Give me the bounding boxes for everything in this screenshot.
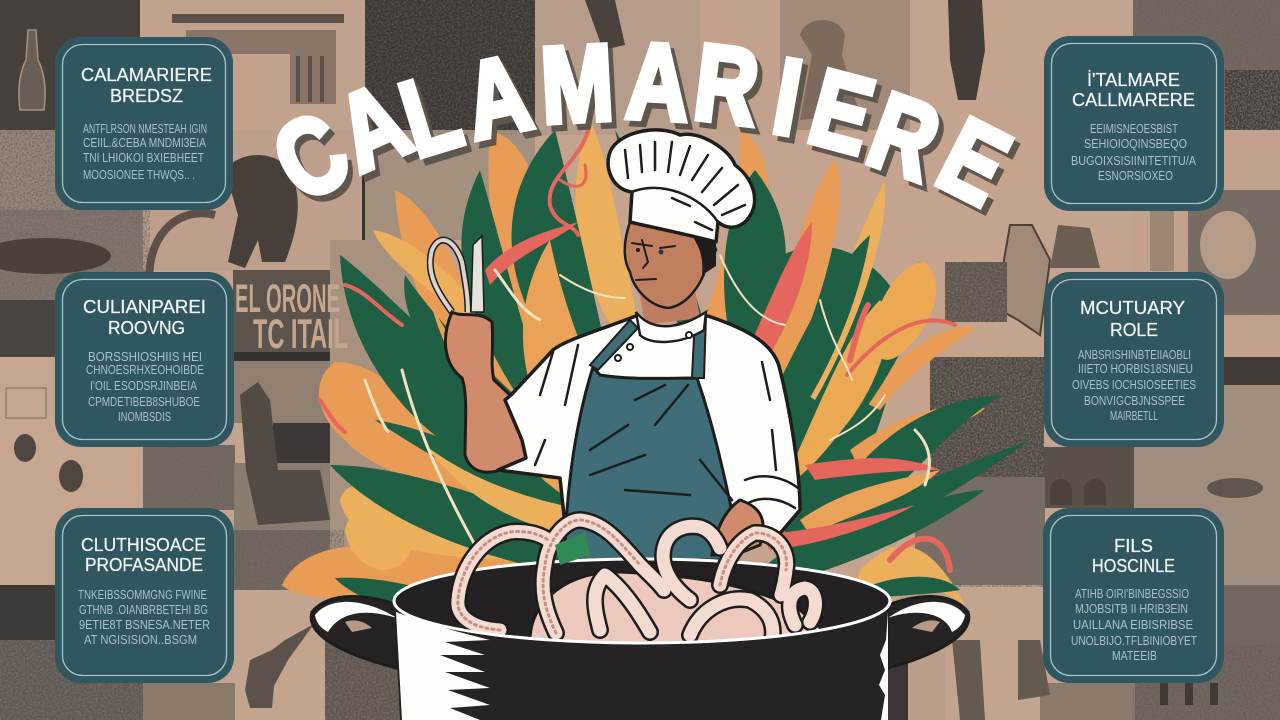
octopus: tentacle flesh <box>458 520 815 640</box>
panel: Fils Hoscinle <box>1043 508 1224 683</box>
heading <box>1092 536 1175 576</box>
body text: BORSSHIOSHIIS HEI <box>88 349 202 364</box>
red tendrils <box>320 122 955 570</box>
heading: CULIANPAREI <box>83 297 206 317</box>
title: E <box>798 45 885 178</box>
body text: INOMBSDIS <box>118 409 171 424</box>
chef: raised forearm and hand <box>445 312 530 472</box>
body text: IIIETO HORBIS18SNIEU <box>1078 361 1193 376</box>
heading <box>83 297 206 338</box>
pot: left body highlight <box>396 612 490 720</box>
body text: CPMDETIBEB8SHUBOE <box>88 394 200 409</box>
print: ruined block <box>945 262 1007 322</box>
heading <box>81 65 212 106</box>
title: A <box>319 58 426 195</box>
heading: ROOVNG <box>108 318 185 338</box>
body text: ANBSRISHINBTEIIAOBLI <box>1078 347 1191 362</box>
heading <box>81 535 206 575</box>
print: poster lettering <box>235 277 348 357</box>
body text <box>1071 586 1197 663</box>
chef: jacket <box>498 316 800 545</box>
title: M <box>538 21 616 146</box>
print: poster lettering: TC ITAIL <box>253 310 348 357</box>
body text: BONVIGCBJNSSPEE <box>1084 393 1185 408</box>
octopus <box>458 520 825 650</box>
body text: MATEEIB <box>1112 648 1157 663</box>
back yellow leaves <box>340 120 965 605</box>
body text <box>1071 121 1196 183</box>
heading: BREDSZ <box>110 86 183 106</box>
pot: rim highlight <box>394 601 890 643</box>
print: shells <box>14 434 83 492</box>
body text: AT NGISISION..BSGM <box>84 632 197 647</box>
body text: OIVEBS IOCHSIOSEETIES <box>1072 377 1196 392</box>
print: tree trunk <box>325 630 400 720</box>
body text: UNOLBIJO.TFLBINIOBYET <box>1071 633 1197 648</box>
body text: SEHIOIOQINSBEQO <box>1084 136 1187 151</box>
print: postcard <box>6 388 46 418</box>
chef illustration <box>430 130 800 560</box>
body text: I'OIL ESODSRJINBEIA <box>90 378 197 393</box>
print: figure top right <box>948 0 985 100</box>
body text: MOOSIONEE THWQS.. . <box>83 167 195 182</box>
octopus: tentacle outlines <box>458 520 815 640</box>
title <box>253 19 1028 228</box>
heading: HOSCINLE <box>1092 556 1175 576</box>
body text: ESNORSIOXEO <box>1098 168 1173 183</box>
chef: neck and collar <box>615 290 706 361</box>
pot: interior <box>394 559 890 643</box>
print: arcades <box>1050 479 1106 505</box>
title: I <box>765 35 810 158</box>
title: E <box>921 94 1028 228</box>
body text <box>86 349 204 424</box>
body text: CEIIL.&CEBA MNDMI3EIA <box>83 135 206 150</box>
print: building <box>172 14 344 104</box>
heading: CALLMARERE <box>1072 90 1195 110</box>
print: portrait face <box>1200 211 1256 279</box>
print: tentacle ornament <box>149 213 215 285</box>
pot: right body highlight <box>879 612 888 720</box>
foliage burst behind the chef <box>282 120 1030 625</box>
pot with octopus <box>311 520 969 720</box>
title: R <box>688 20 765 149</box>
body text: TNI LHIOKOI BXIEBHEET <box>83 150 204 165</box>
cream strands <box>365 255 929 545</box>
chef: head <box>625 222 716 308</box>
title: R <box>854 69 955 204</box>
print: second cook <box>1050 225 1100 268</box>
body text: BUGOIXSISIINITETITU/A <box>1071 153 1196 168</box>
heading: CALAMARIERE <box>81 65 212 85</box>
panel: Cluthisoace Profasande <box>55 508 234 683</box>
heading: ROLE <box>1110 320 1158 340</box>
print: seated figure <box>240 382 330 525</box>
print: tub <box>0 238 111 274</box>
title: L <box>387 49 473 180</box>
pot: right handle <box>888 596 969 668</box>
title: A <box>454 31 540 162</box>
chef: toque <box>608 130 755 242</box>
body text: ANTFLRSON NMESTEAH IGIN <box>83 121 207 136</box>
body text: EEIMISNEOESBIST <box>1090 121 1178 136</box>
title: A <box>624 19 692 144</box>
octopus: glint <box>555 532 590 565</box>
front orange leaves <box>425 240 940 535</box>
print: dark figure at top centre <box>585 0 625 50</box>
panel: Culianparei Roovng <box>55 272 234 447</box>
heading: PROFASANDE <box>85 555 203 575</box>
heading: FILS <box>1114 536 1153 556</box>
octopus: central mass <box>530 572 825 650</box>
heading <box>1072 70 1195 110</box>
title: C <box>253 88 368 224</box>
print: bottle <box>19 30 45 110</box>
print: standing figure <box>225 155 298 268</box>
body text: CHNOESRHXEOHOIBDE <box>86 362 204 377</box>
green leaves <box>330 130 1030 625</box>
heading: İ'TALMARE <box>1087 70 1180 90</box>
print: bowing man <box>245 624 314 708</box>
back filler leaves <box>400 240 900 600</box>
body text: GTHNB .OIANBRBETEHI BG <box>79 602 208 617</box>
heading: MCUTUARY <box>1080 298 1185 318</box>
panel: Italmare Callmarere <box>1044 36 1224 211</box>
chef: tongs <box>430 236 484 312</box>
body text <box>78 587 210 647</box>
panel: Mcutuary Role <box>1044 272 1224 447</box>
heading: CLUTHISOACE <box>81 535 206 555</box>
body text: ATIHB OIRI'BINBEGSSIO <box>1075 586 1189 601</box>
body text: TNKEIBSSOMMGNG FWINE <box>78 587 207 602</box>
chef: lowered hand <box>712 500 763 555</box>
print: woman cook <box>1000 225 1050 335</box>
print: poster lettering: EL ORONE <box>235 277 340 321</box>
pot: left handle <box>311 596 397 668</box>
body text: MJOBSITB II HRIB3EIN <box>1075 601 1188 616</box>
octopus: suckers <box>458 520 787 633</box>
panel: Calamariere Bredsz <box>55 37 233 210</box>
pot: body <box>394 601 890 720</box>
body text: 9ETIE8T BSNESA.NETER <box>79 617 210 632</box>
print: cat and man <box>952 640 1050 720</box>
print: boy <box>800 20 860 120</box>
heading <box>1080 298 1185 340</box>
print: palazzo <box>1160 683 1218 705</box>
body text <box>83 121 207 182</box>
print: smoke and boat <box>1207 478 1263 498</box>
chef: apron <box>565 315 735 560</box>
back orange leaves <box>282 130 985 601</box>
body text <box>1072 347 1196 423</box>
red streaks <box>485 222 940 550</box>
body text: MAIRBETLL <box>1110 408 1158 423</box>
body text: UAILLANA EIBISRIBSE <box>1073 617 1193 632</box>
